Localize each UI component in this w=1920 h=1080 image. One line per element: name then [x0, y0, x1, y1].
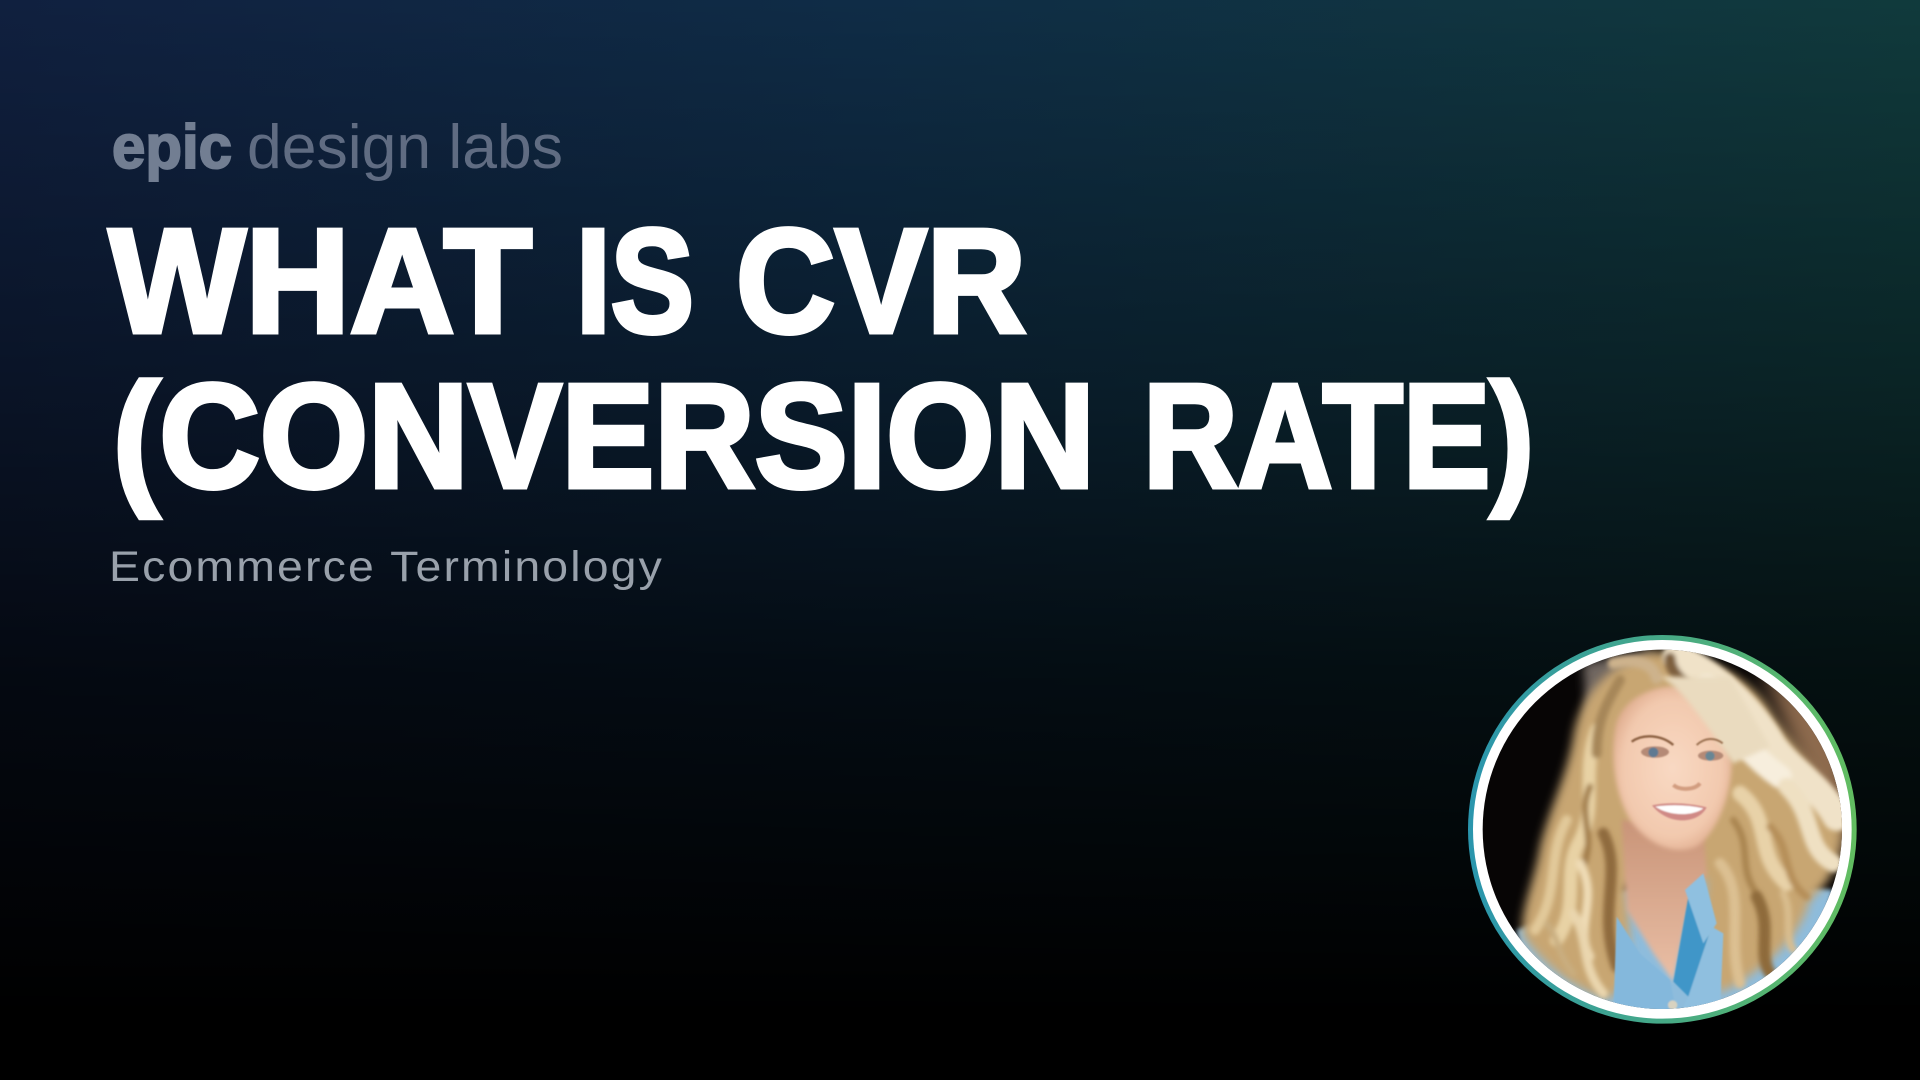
subtitle: Ecommerce Terminology	[109, 543, 664, 591]
title: CVR	[736, 199, 1026, 364]
title: (CONVERSION	[113, 354, 1095, 519]
facial features	[1632, 736, 1723, 820]
brand logo: epic	[112, 113, 232, 182]
neck	[1622, 820, 1707, 982]
title: RATE)	[1143, 354, 1534, 519]
shirt	[1517, 867, 1833, 1017]
collar and placket	[1613, 873, 1723, 1013]
portrait badge	[1468, 635, 1857, 1024]
brand logo	[112, 113, 563, 182]
title: IS	[576, 199, 694, 364]
portrait photo	[1480, 647, 1850, 1017]
brand logo: design labs	[247, 113, 563, 182]
face	[1613, 686, 1732, 850]
title	[109, 199, 1534, 519]
hair back	[1522, 652, 1842, 1000]
hair highlights	[1535, 657, 1837, 993]
title: WHAT	[109, 199, 532, 364]
